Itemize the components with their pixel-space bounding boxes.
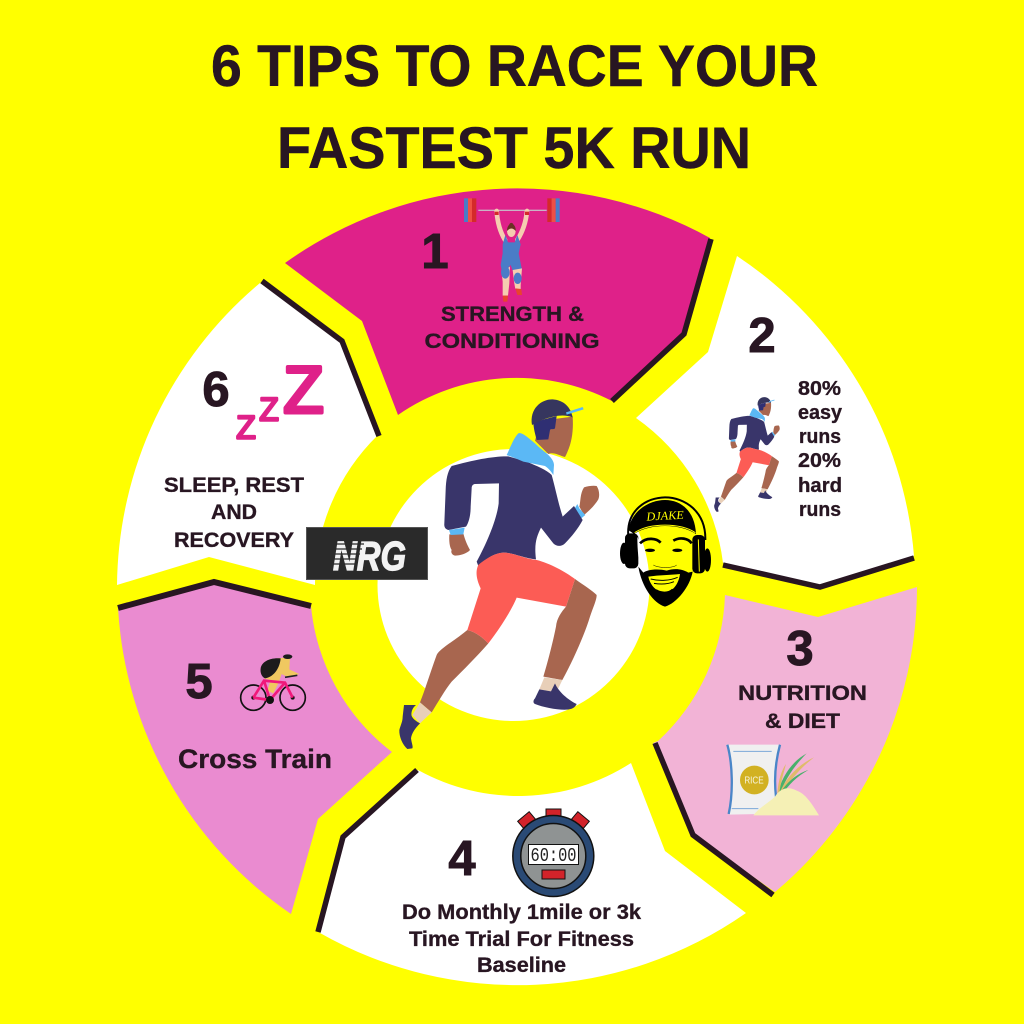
icon: sleeping z letters (236, 352, 324, 446)
icon: large runner (399, 399, 599, 749)
text: sleep, rest and recovery: SLEEP, REST (164, 474, 304, 497)
text: nutrition and diet: & DIET (765, 710, 840, 733)
icon: rice bag and grain (727, 745, 819, 815)
text: strength and conditioning: CONDITIONING (424, 330, 600, 353)
center white circle (378, 449, 650, 721)
text: sleep, rest and recovery: AND (211, 501, 257, 524)
logo: NRG (306, 528, 428, 580)
logo: DJ Lake face with headphones: DJAKE (645, 508, 685, 524)
panel: tip 5 cross train (118, 582, 392, 914)
title: 6 TIPS TO RACE YOUR (211, 34, 818, 99)
panel: tip 3 nutrition and diet (653, 587, 917, 895)
text: 80 percent easy, 20 percent hard: easy (798, 402, 843, 424)
text: strength and conditioning: STRENGTH & (441, 303, 584, 326)
panel: tip 2 easy and hard runs (636, 256, 914, 587)
text: nutrition and diet (738, 682, 867, 733)
logo: NRG: NRG (333, 533, 406, 579)
number 2: 2 (748, 309, 776, 363)
text: 80 percent easy, 20 percent hard: 80% (798, 378, 841, 400)
text: strength and conditioning (424, 303, 600, 353)
text: sleep, rest and recovery (164, 474, 304, 552)
number 6: 6 (202, 363, 230, 417)
text: 80 percent easy, 20 percent hard: hard (798, 475, 842, 497)
text: 80 percent easy, 20 percent hard (798, 378, 843, 521)
text: 80 percent easy, 20 percent hard: runs (799, 426, 841, 448)
text: cross train: Cross Train (178, 744, 332, 774)
number 3: 3 (786, 622, 814, 676)
title (211, 34, 818, 181)
text: monthly time trial: Baseline (477, 954, 566, 977)
icon: small runner (714, 397, 780, 512)
number 4: 4 (448, 832, 476, 886)
panel: tip 4 monthly time trial (318, 763, 746, 985)
icon: stopwatch: 60:00 (530, 845, 576, 867)
text: monthly time trial (402, 901, 641, 977)
panel: tip 1 strength and conditioning (285, 188, 711, 415)
panel: tip 6 sleep, rest and recovery (117, 281, 379, 585)
logo: DJ Lake face with headphones (620, 497, 711, 607)
number 1: 1 (421, 225, 449, 279)
icon: sleeping z letters: Z (283, 352, 324, 426)
title: FASTEST 5K RUN (277, 116, 751, 181)
text: monthly time trial: Do Monthly 1mile or 3k (402, 901, 641, 924)
number 5: 5 (185, 655, 213, 709)
text: nutrition and diet: NUTRITION (738, 682, 867, 705)
icon: weightlifter (464, 198, 560, 302)
icon: rice bag and grain: RICE (744, 775, 764, 786)
text: sleep, rest and recovery: RECOVERY (174, 529, 294, 552)
text: 80 percent easy, 20 percent hard: runs (799, 499, 841, 521)
text: 80 percent easy, 20 percent hard: 20% (798, 450, 841, 472)
icon: sleeping z letters: Z (236, 410, 256, 446)
text: monthly time trial: Time Trial For Fitness (409, 928, 634, 951)
icon: cyclist (241, 654, 305, 710)
icon: sleeping z letters: Z (259, 392, 279, 428)
icon: stopwatch (513, 809, 594, 896)
